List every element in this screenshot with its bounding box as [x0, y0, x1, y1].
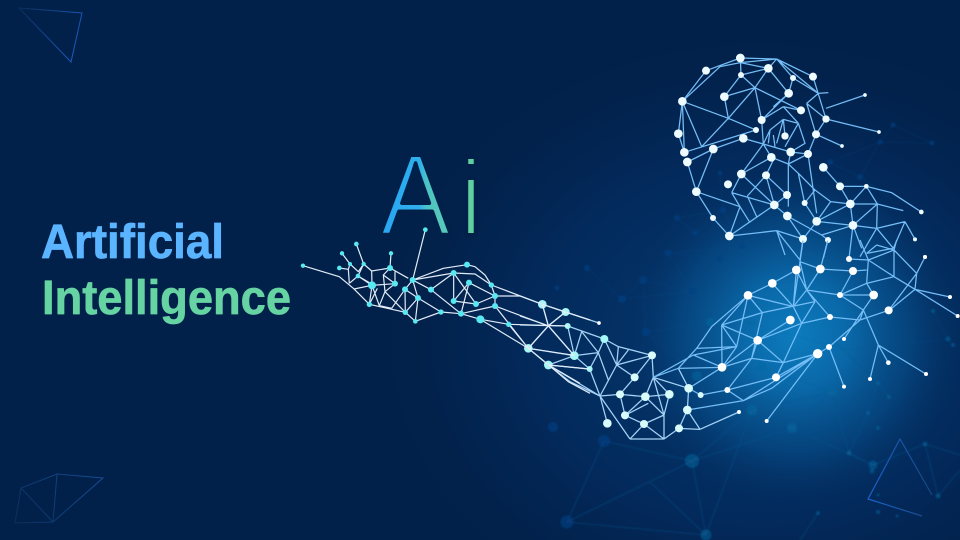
decorative triangle: top left [19, 8, 82, 62]
decorative mesh: bottom left [15, 474, 103, 523]
letter A: A [380, 130, 452, 260]
head nodes [674, 54, 927, 259]
arm mesh lines [520, 296, 739, 439]
letter i: i [459, 137, 483, 258]
arm nodes: cyan [524, 300, 608, 372]
head and shoulder network [674, 54, 927, 260]
decorative triangle: bottom right [868, 439, 932, 516]
hand nodes [301, 227, 511, 327]
arm nodes: white [597, 255, 960, 423]
arm network [520, 240, 960, 439]
title [41, 216, 291, 325]
background network [548, 122, 960, 540]
hand mesh lines [303, 230, 590, 393]
head mesh lines [678, 58, 921, 260]
hand network [301, 227, 590, 393]
arm nodes: pale [603, 351, 704, 432]
title line: Intelligence: Intelligence [42, 272, 291, 325]
title line: Artificial: Artificial [41, 216, 224, 269]
AI lettering [380, 130, 483, 260]
